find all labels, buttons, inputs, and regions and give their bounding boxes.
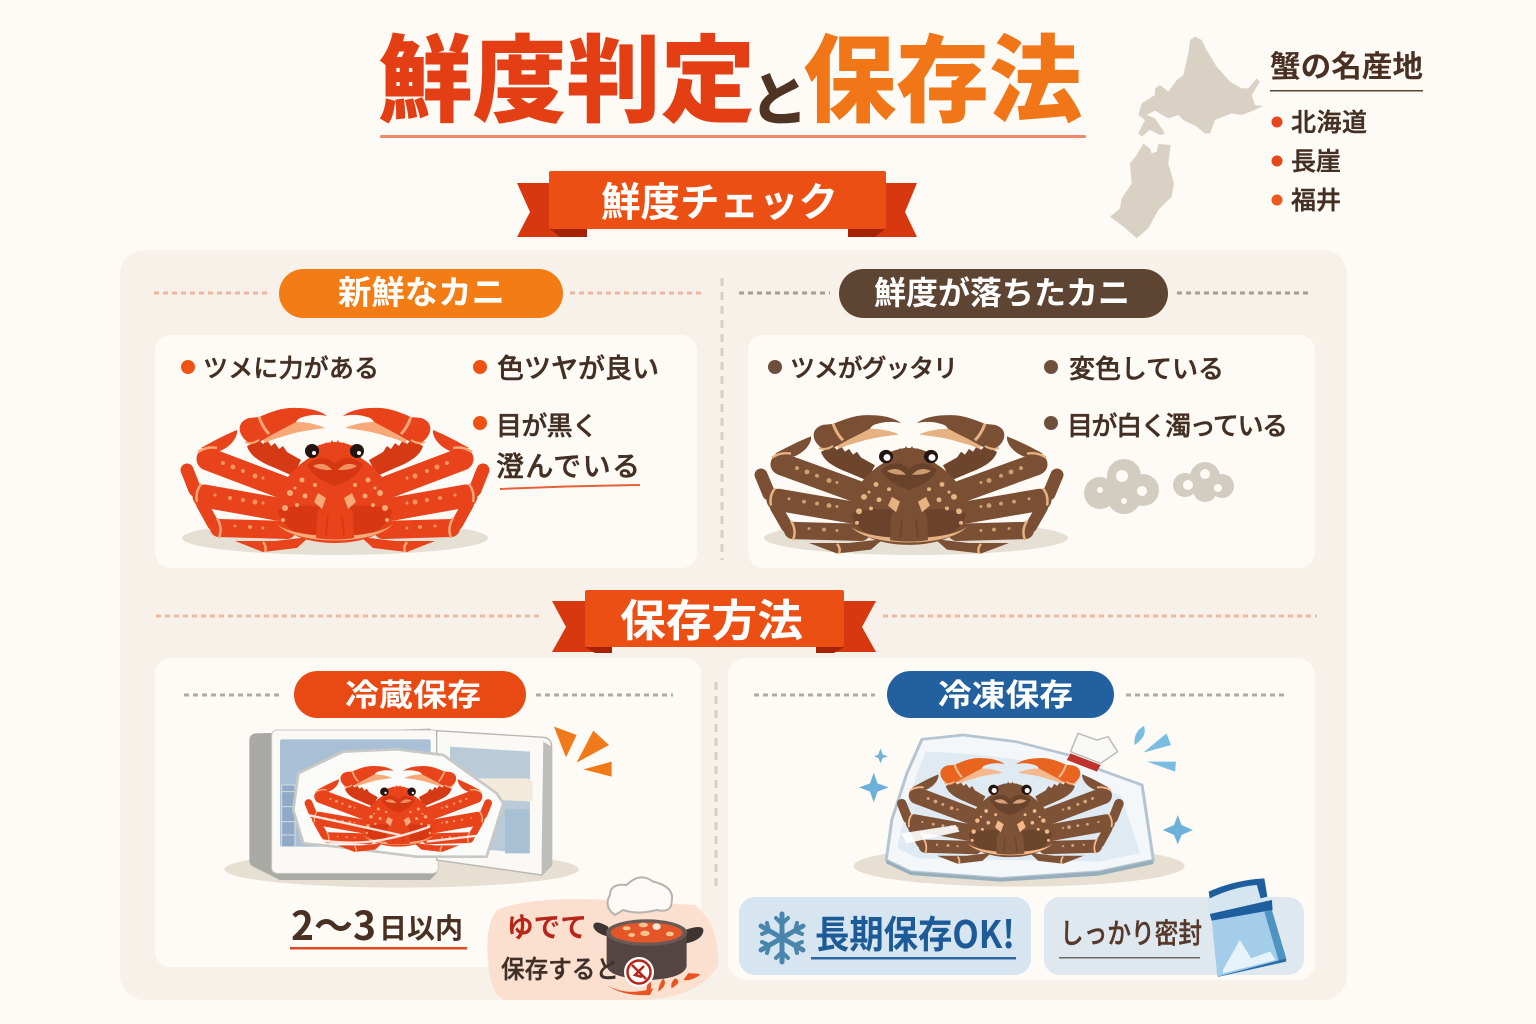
divider decoration top — [154, 292, 703, 294]
legend: crab regions — [1270, 42, 1423, 217]
callout: boiled storage warning — [487, 877, 718, 1000]
callout: boiled storage warning: ゆでて — [507, 906, 587, 946]
panel: fresh crab: 色ツヤが良い — [497, 347, 659, 386]
panel: stale crab: ツメがグッタリ — [790, 349, 958, 385]
ribbon: freshness check — [517, 170, 917, 237]
title: 鮮度判定 — [378, 5, 755, 142]
pill: refrigerated: 冷蔵保存 — [345, 670, 481, 715]
title — [378, 5, 1086, 142]
pill: fresh crab — [279, 266, 563, 318]
ribbon: storage method — [552, 585, 876, 653]
icon: cloudy eyes — [1084, 459, 1234, 514]
text: 2-3 days: 日以内 — [379, 907, 463, 947]
icon: snowflake — [761, 914, 803, 962]
panel: fresh crab: 目が黒く — [496, 406, 598, 443]
legend: crab regions: 蟹の名産地 — [1270, 42, 1423, 86]
map of Japan — [1110, 37, 1263, 238]
panel: stale crab: 目が白く濁っている — [1067, 406, 1288, 443]
icon: freezer bag with crab — [853, 726, 1193, 887]
callout: seal tightly — [1044, 878, 1304, 977]
panel: refrigerated storage — [155, 658, 701, 967]
panel: fresh crab — [155, 335, 697, 568]
crab illustration: stale brown — [761, 415, 1068, 555]
panel: frozen storage — [728, 658, 1315, 980]
panel: fresh crab: ツメに力がある — [203, 349, 379, 385]
text: 2-3 days: 2～3 — [291, 894, 376, 952]
divider decoration storage — [156, 614, 1317, 618]
icon: refrigerator with crab — [224, 727, 612, 888]
legend: crab regions: 北海道 — [1291, 103, 1367, 139]
panel: stale crab — [748, 335, 1315, 568]
pill: fresh crab: 新鮮なカニ — [338, 266, 505, 314]
panel: stale crab: 変色している — [1069, 349, 1224, 386]
title: と — [750, 53, 808, 137]
legend: crab regions: 長崖 — [1291, 142, 1341, 178]
pill: stale crab: 鮮度が落ちたカニ — [874, 268, 1130, 314]
crab illustration: fresh red — [182, 408, 488, 555]
pill: frozen: 冷凍保存 — [938, 670, 1073, 715]
panel: fresh crab: 澄んでいる — [496, 445, 640, 485]
icon: sealed package — [1207, 878, 1286, 977]
callout: seal tightly: しっかり密封 — [1060, 912, 1202, 952]
callout: long-term storage OK — [739, 897, 1031, 975]
icon: no sign — [625, 958, 653, 986]
callout: long-term storage OK: 長期保存OK! — [815, 904, 1015, 959]
divider decoration vertical — [714, 682, 718, 890]
title: 保存法 — [803, 5, 1082, 142]
ribbon: freshness check: 鮮度チェック — [601, 170, 838, 228]
legend: crab regions: 福井 — [1291, 181, 1341, 217]
background panel — [120, 250, 1347, 1000]
text: 2-3 days — [290, 894, 467, 952]
icon: pot with steam and flame — [593, 877, 703, 995]
callout: boiled storage warning: 保存すると — [501, 950, 619, 986]
pill: refrigerated — [294, 670, 526, 718]
ribbon: storage method: 保存方法 — [620, 585, 803, 649]
pill: frozen — [887, 670, 1114, 718]
